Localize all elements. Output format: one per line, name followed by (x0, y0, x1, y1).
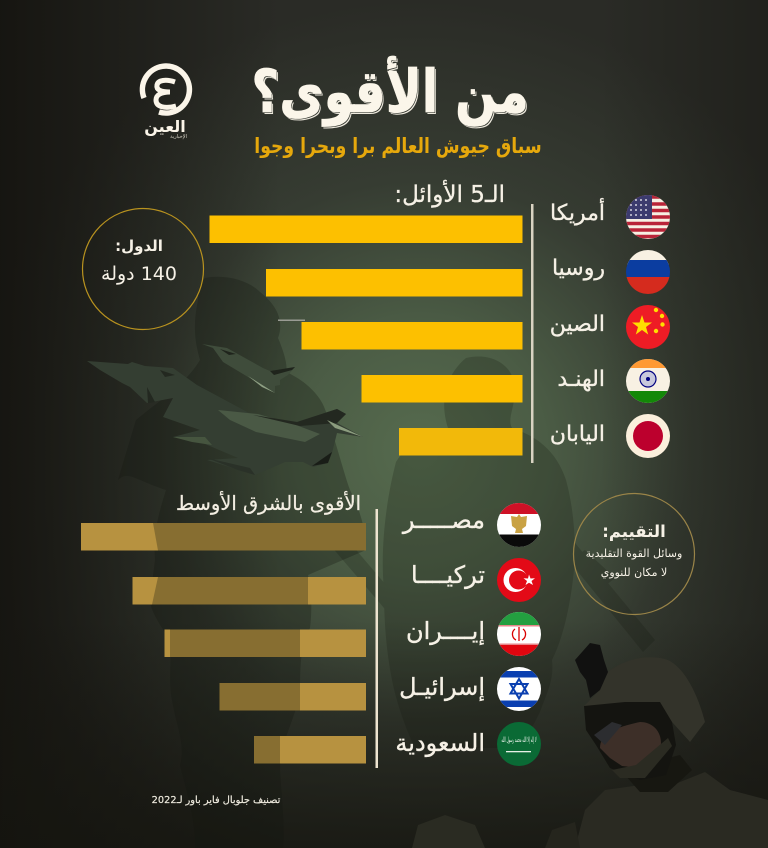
rating callout text: التقييم: (602, 522, 666, 541)
heading: middle east: الأقوى بالشرق الأوسط (176, 492, 361, 515)
logo wordmark: العين (144, 117, 186, 136)
soldier photo, bottom right (412, 643, 768, 848)
heading: top 5: الـ5 الأوائل: (394, 182, 505, 208)
large jet (87, 361, 363, 475)
logo: ring (142, 66, 189, 113)
soldier silhouette: right (330, 356, 655, 748)
small jet (202, 344, 295, 393)
label: Egypt: مصـــــر (403, 506, 485, 534)
flag: Russia (626, 250, 670, 294)
countries callout text: 140 دولة (101, 263, 177, 285)
logo tagline: الإخبارية (170, 134, 187, 140)
countries callout text: الدول: (115, 237, 163, 255)
flag: Iran (497, 612, 541, 656)
countries callout text (101, 237, 177, 285)
rating callout text: لا مكان للنووي (601, 566, 667, 578)
flag: Egypt (497, 503, 541, 548)
label: Japan: اليابان (550, 422, 605, 447)
label: Saudi Arabia: السعودية (395, 729, 485, 757)
circle: countries (82, 208, 204, 330)
label: India: الهنـد (557, 367, 605, 392)
label: Iran: إيــــران (406, 617, 485, 645)
flag: Turkey (497, 558, 541, 602)
label: Turkey: تركيــــا (411, 561, 485, 589)
flag: China (626, 305, 670, 349)
vertical divider: bottom (376, 509, 378, 768)
gold bars: middle east (81, 523, 366, 764)
rating callout text: وسائل القوة التقليدية (586, 546, 682, 560)
flag: USA (626, 195, 670, 239)
circle: rating (574, 494, 694, 614)
label: USA: أمريكا (550, 201, 605, 226)
vertical divider: top (531, 204, 534, 463)
label: Russia: روسيا (552, 256, 605, 281)
gold bars: top 5 (210, 216, 522, 456)
label: Israel: إسرائيـل (399, 673, 485, 701)
title: من الأقوى؟ (251, 57, 529, 126)
flag: India (626, 359, 670, 403)
rating callout text (586, 522, 682, 578)
bar shadows from silhouettes (152, 523, 366, 764)
source note: تصنيف جلوبال فاير باور لـ2022 (152, 795, 280, 806)
soldier silhouette: left (118, 277, 366, 848)
flag: Japan (626, 414, 670, 458)
label: China: الصين (550, 312, 605, 337)
flag: Israel (497, 667, 541, 711)
text: لا إله إلا الله محمد رسول الله (502, 736, 537, 744)
flag: Saudi Arabia (497, 722, 541, 766)
subtitle: سباق جيوش العالم برا وبحرا وجوا (254, 134, 542, 158)
